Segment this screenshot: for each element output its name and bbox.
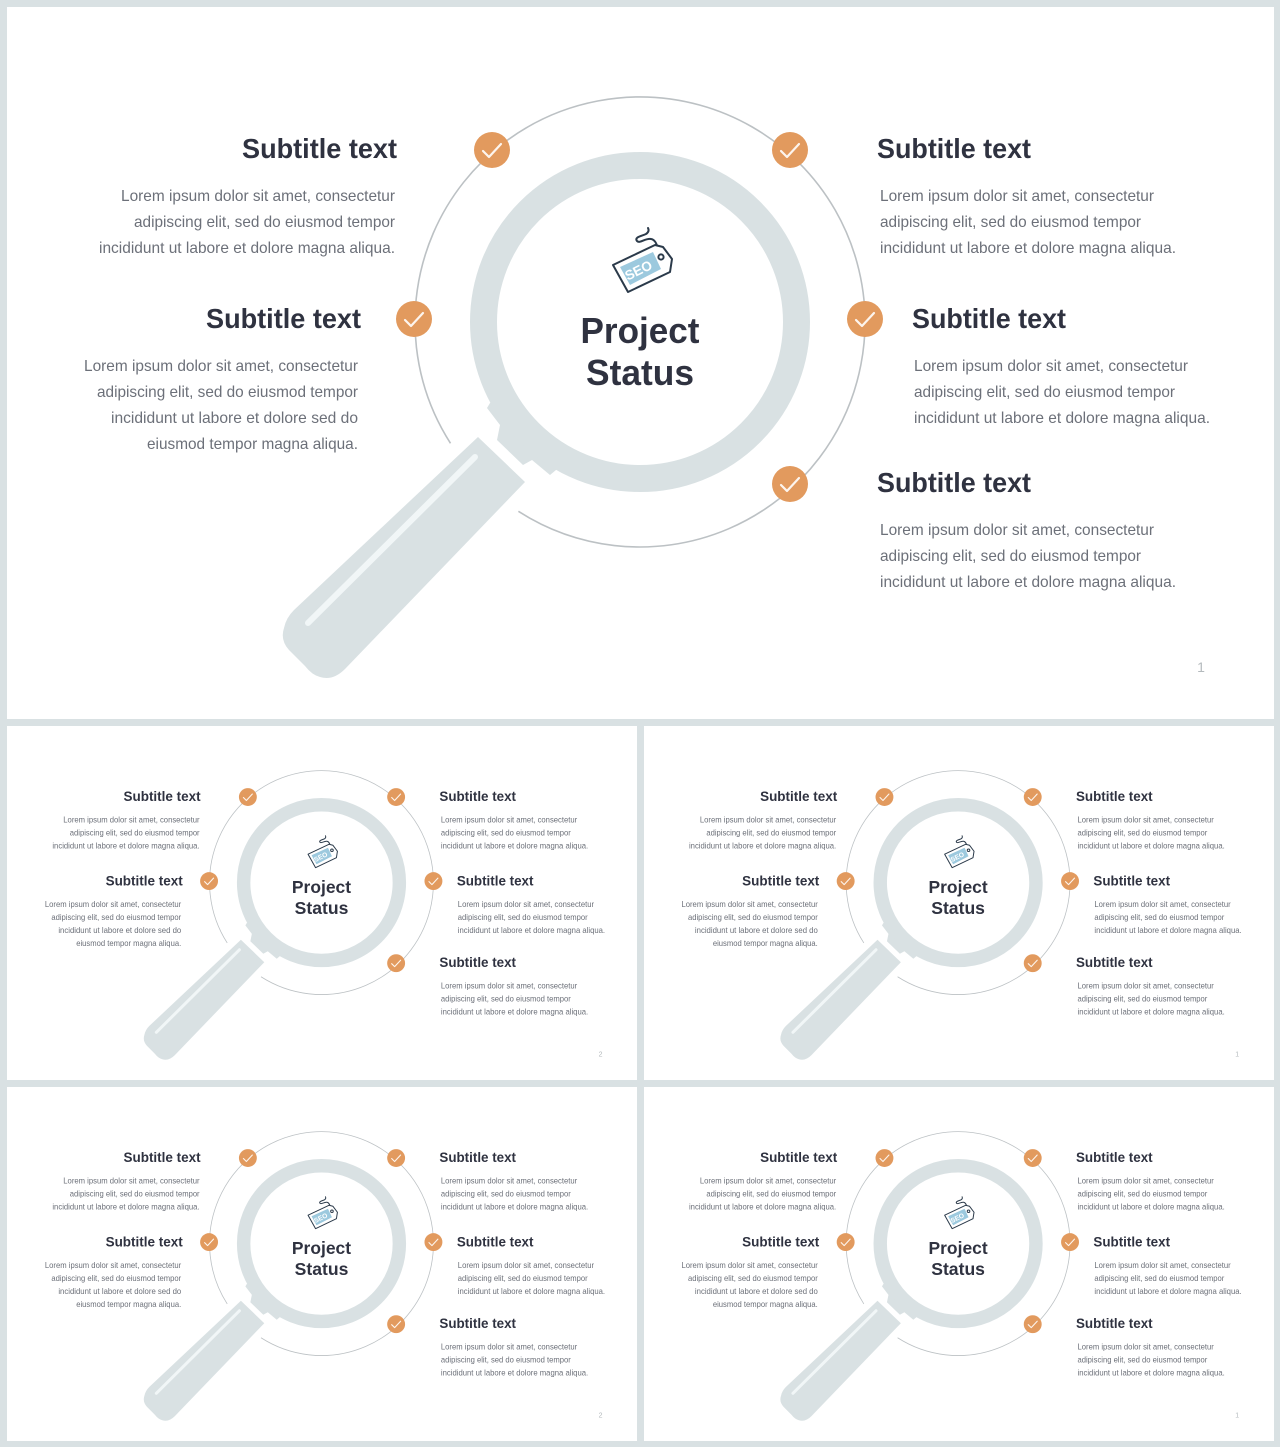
thumbnail content: adipiscing elit, sed do eiusmod tempor: [688, 913, 818, 922]
text block: bottom right: adipiscing elit, sed do eiusmod tempor: [880, 548, 1142, 565]
thumbnail content: [45, 1132, 605, 1421]
thumbnail content: SEO: [313, 851, 329, 864]
thumbnail content: adipiscing elit, sed do eiusmod tempor: [70, 828, 200, 837]
thumbnail content: Subtitle text: [742, 873, 820, 889]
thumbnail content: 2: [599, 1052, 603, 1059]
thumbnail content: SEO: [950, 851, 966, 864]
panel: slide thumbnail top right: [644, 726, 1274, 1080]
text block: bottom right: [877, 467, 1176, 591]
thumbnail content: Subtitle text: [106, 1234, 183, 1250]
thumbnail content: Project: [292, 1238, 351, 1258]
text block: top right: [877, 133, 1176, 257]
thumbnail content: incididunt ut labore et dolore magna aliqua.: [1078, 841, 1225, 850]
thumbnail content: 1: [1235, 1413, 1239, 1420]
thumbnail content: adipiscing elit, sed do eiusmod tempor: [441, 1189, 571, 1198]
thumbnail content: Lorem ipsum dolor sit amet, consectetur: [45, 900, 182, 909]
thumbnail content: Subtitle text: [1076, 954, 1153, 970]
thumbnail content: [45, 771, 605, 1060]
thumbnail content: Lorem ipsum dolor sit amet, consectetur: [458, 900, 594, 909]
badge: top left check: [474, 132, 510, 168]
text block: bottom right: Subtitle text: [877, 467, 1031, 498]
thumbnail content: incididunt ut labore et dolore magna aliqua.: [1094, 1287, 1242, 1296]
thumbnail content: incididunt ut labore et dolore magna aliqua.: [1094, 926, 1242, 935]
thumbnail content: incididunt ut labore et dolore magna aliqua.: [458, 926, 605, 935]
thumbnail content: Lorem ipsum dolor sit amet, consectetur: [1078, 982, 1214, 991]
thumbnail content: Subtitle text: [1093, 873, 1170, 889]
thumbnail content: Lorem ipsum dolor sit amet, consectetur: [441, 982, 578, 991]
thumbnail content: adipiscing elit, sed do eiusmod tempor: [441, 828, 571, 837]
thumbnail content: incididunt ut labore et dolore magna aliqua.: [441, 841, 588, 850]
thumbnail content: Subtitle text: [1093, 1234, 1170, 1250]
thumbnail content: 1: [1235, 1052, 1239, 1059]
thumbnail content: Subtitle text: [1076, 1149, 1153, 1165]
thumbnail content: Subtitle text: [457, 873, 534, 889]
text block: top left: adipiscing elit, sed do eiusmod tempor: [134, 214, 396, 231]
thumbnail content: SEO: [313, 1212, 329, 1225]
orbit ring: [415, 97, 865, 547]
thumbnail content: Project: [928, 877, 988, 897]
thumbnail content: incididunt ut labore et dolore magna aliqua.: [689, 841, 836, 850]
badge: middle left check: [396, 301, 432, 337]
thumbnail content: Lorem ipsum dolor sit amet, consectetur: [63, 1176, 200, 1185]
thumbnail content: Lorem ipsum dolor sit amet, consectetur: [681, 900, 818, 909]
text block: top right: Subtitle text: [877, 133, 1031, 164]
thumbnail content: adipiscing elit, sed do eiusmod tempor: [441, 1355, 571, 1364]
thumbnail content: Subtitle text: [457, 1234, 534, 1250]
badge: top right check: [772, 132, 808, 168]
text block: bottom right: Lorem ipsum dolor sit amet, consectetur: [880, 522, 1155, 539]
thumbnail content: Subtitle text: [439, 954, 516, 970]
thumbnail content: Lorem ipsum dolor sit amet, consectetur: [1078, 1176, 1214, 1185]
thumbnail content: adipiscing elit, sed do eiusmod tempor: [1094, 1274, 1225, 1283]
thumbnail content: Lorem ipsum dolor sit amet, consectetur: [700, 1176, 837, 1185]
thumbnail content: Subtitle text: [439, 1149, 516, 1165]
thumbnail content: adipiscing elit, sed do eiusmod tempor: [1094, 913, 1225, 922]
thumbnail content: Lorem ipsum dolor sit amet, consectetur: [1094, 1261, 1231, 1270]
text block: middle right: Subtitle text: [912, 303, 1066, 334]
thumbnail content: Subtitle text: [123, 1149, 201, 1165]
thumbnail content: [681, 771, 1242, 1060]
thumbnail content: Project: [292, 877, 351, 897]
thumbnail content: Subtitle text: [439, 1315, 516, 1331]
thumbnail content: adipiscing elit, sed do eiusmod tempor: [1078, 1189, 1208, 1198]
thumbnail content: Project: [928, 1238, 988, 1258]
text block: top right: incididunt ut labore et dolore magna aliqua.: [880, 240, 1176, 257]
text block: middle right: Lorem ipsum dolor sit amet, consectetur: [914, 358, 1189, 375]
text block: middle left: adipiscing elit, sed do eiusmod tempor: [97, 384, 359, 401]
text block: middle right: adipiscing elit, sed do eiusmod tempor: [914, 384, 1176, 401]
thumbnail content: [681, 1132, 1242, 1421]
thumbnail content: Subtitle text: [742, 1234, 820, 1250]
text block: middle left: Subtitle text: [206, 303, 361, 334]
thumbnail content: adipiscing elit, sed do eiusmod tempor: [706, 1189, 837, 1198]
thumbnail content: eiusmod tempor magna aliqua.: [76, 939, 181, 948]
thumbnail content: Status: [931, 1259, 985, 1279]
text block: middle left: incididunt ut labore et dolore sed do: [111, 410, 358, 427]
thumbnail content: Lorem ipsum dolor sit amet, consectetur: [458, 1261, 594, 1270]
thumbnail content: incididunt ut labore et dolore magna aliqua.: [52, 841, 200, 850]
thumbnail content: Subtitle text: [760, 788, 838, 804]
thumbnail content: incididunt ut labore et dolore magna aliqua.: [689, 1202, 836, 1211]
thumbnail content: Lorem ipsum dolor sit amet, consectetur: [1078, 815, 1214, 824]
panel: slide thumbnail top left: [7, 726, 637, 1080]
thumbnail content: Lorem ipsum dolor sit amet, consectetur: [45, 1261, 182, 1270]
thumbnail content: Subtitle text: [1076, 1315, 1153, 1331]
thumbnail content: adipiscing elit, sed do eiusmod tempor: [441, 994, 571, 1003]
text block: middle right: [912, 303, 1210, 427]
panel: slide thumbnail bottom right: [644, 1087, 1274, 1441]
text block: middle right: incididunt ut labore et dolore magna aliqua.: [914, 410, 1210, 427]
thumbnail content: adipiscing elit, sed do eiusmod tempor: [51, 1274, 182, 1283]
thumbnail content: adipiscing elit, sed do eiusmod tempor: [51, 913, 182, 922]
thumbnail content: Lorem ipsum dolor sit amet, consectetur: [441, 1176, 578, 1185]
thumbnail content: incididunt ut labore et dolore magna aliqua.: [441, 1368, 588, 1377]
text block: top left: Lorem ipsum dolor sit amet, consectetur: [121, 188, 396, 205]
panel: main slide: [7, 7, 1274, 719]
thumbnail content: Subtitle text: [760, 1149, 838, 1165]
thumbnail content: Status: [295, 1259, 348, 1279]
thumbnail content: adipiscing elit, sed do eiusmod tempor: [1078, 828, 1208, 837]
thumbnail content: adipiscing elit, sed do eiusmod tempor: [1078, 994, 1208, 1003]
thumbnail content: incididunt ut labore et dolore sed do: [695, 1287, 818, 1296]
thumbnail content: incididunt ut labore et dolore magna aliqua.: [52, 1202, 200, 1211]
thumbnail content: adipiscing elit, sed do eiusmod tempor: [70, 1189, 200, 1198]
text block: top left: Subtitle text: [242, 133, 397, 164]
thumbnail content: incididunt ut labore et dolore magna aliqua.: [1078, 1368, 1225, 1377]
thumbnail content: Lorem ipsum dolor sit amet, consectetur: [700, 815, 837, 824]
thumbnail content: Lorem ipsum dolor sit amet, consectetur: [1094, 900, 1231, 909]
thumbnail content: incididunt ut labore et dolore magna aliqua.: [1078, 1007, 1225, 1016]
thumbnail content: Subtitle text: [123, 788, 201, 804]
text block: top left: incididunt ut labore et dolore magna aliqua.: [99, 240, 395, 257]
icon: SEO tag: [613, 228, 672, 292]
thumbnail content: Lorem ipsum dolor sit amet, consectetur: [441, 815, 578, 824]
page number: 1: [1197, 659, 1205, 675]
text block: top right: adipiscing elit, sed do eiusmod tempor: [880, 214, 1142, 231]
thumbnail content: adipiscing elit, sed do eiusmod tempor: [458, 1274, 588, 1283]
thumbnail content: Status: [295, 898, 348, 918]
thumbnail content: Lorem ipsum dolor sit amet, consectetur: [441, 1343, 578, 1352]
thumbnail content: incididunt ut labore et dolore magna aliqua.: [458, 1287, 605, 1296]
title: Project: [580, 310, 700, 351]
panel: slide thumbnail bottom left: [7, 1087, 637, 1441]
thumbnail content: Lorem ipsum dolor sit amet, consectetur: [63, 815, 200, 824]
text block: middle left: [84, 303, 361, 453]
thumbnail content: Lorem ipsum dolor sit amet, consectetur: [681, 1261, 818, 1270]
text block: top right: Lorem ipsum dolor sit amet, consectetur: [880, 188, 1155, 205]
text block: middle left: eiusmod tempor magna aliqua.: [147, 436, 358, 453]
text block: bottom right: incididunt ut labore et dolore magna aliqua.: [880, 574, 1176, 591]
thumbnail content: adipiscing elit, sed do eiusmod tempor: [688, 1274, 818, 1283]
title: [580, 310, 700, 393]
thumbnail content: adipiscing elit, sed do eiusmod tempor: [458, 913, 588, 922]
thumbnail content: SEO: [950, 1212, 966, 1225]
thumbnail content: incididunt ut labore et dolore magna aliqua.: [441, 1007, 588, 1016]
thumbnail content: Status: [931, 898, 985, 918]
magnifier: [283, 166, 796, 678]
text block: top left: [99, 133, 397, 257]
thumbnail content: incididunt ut labore et dolore sed do: [695, 926, 818, 935]
thumbnail content: adipiscing elit, sed do eiusmod tempor: [706, 828, 837, 837]
text block: middle left: Lorem ipsum dolor sit amet, consectetur: [84, 358, 359, 375]
badge: bottom right check: [772, 466, 808, 502]
thumbnail content: 2: [599, 1413, 603, 1420]
thumbnail content: incididunt ut labore et dolore sed do: [58, 1287, 182, 1296]
thumbnail content: Subtitle text: [106, 873, 183, 889]
title: Status: [586, 352, 694, 393]
thumbnail content: incididunt ut labore et dolore magna aliqua.: [1078, 1202, 1225, 1211]
thumbnail content: Subtitle text: [1076, 788, 1153, 804]
thumbnail content: adipiscing elit, sed do eiusmod tempor: [1078, 1355, 1208, 1364]
thumbnail content: incididunt ut labore et dolore magna aliqua.: [441, 1202, 588, 1211]
badge: middle right check: [847, 301, 883, 337]
thumbnail content: eiusmod tempor magna aliqua.: [713, 939, 818, 948]
thumbnail content: eiusmod tempor magna aliqua.: [713, 1300, 818, 1309]
thumbnail content: Lorem ipsum dolor sit amet, consectetur: [1078, 1343, 1214, 1352]
thumbnail content: incididunt ut labore et dolore sed do: [58, 926, 182, 935]
thumbnail content: eiusmod tempor magna aliqua.: [76, 1300, 181, 1309]
thumbnail content: Subtitle text: [439, 788, 516, 804]
icon: SEO tag: SEO: [622, 257, 655, 283]
